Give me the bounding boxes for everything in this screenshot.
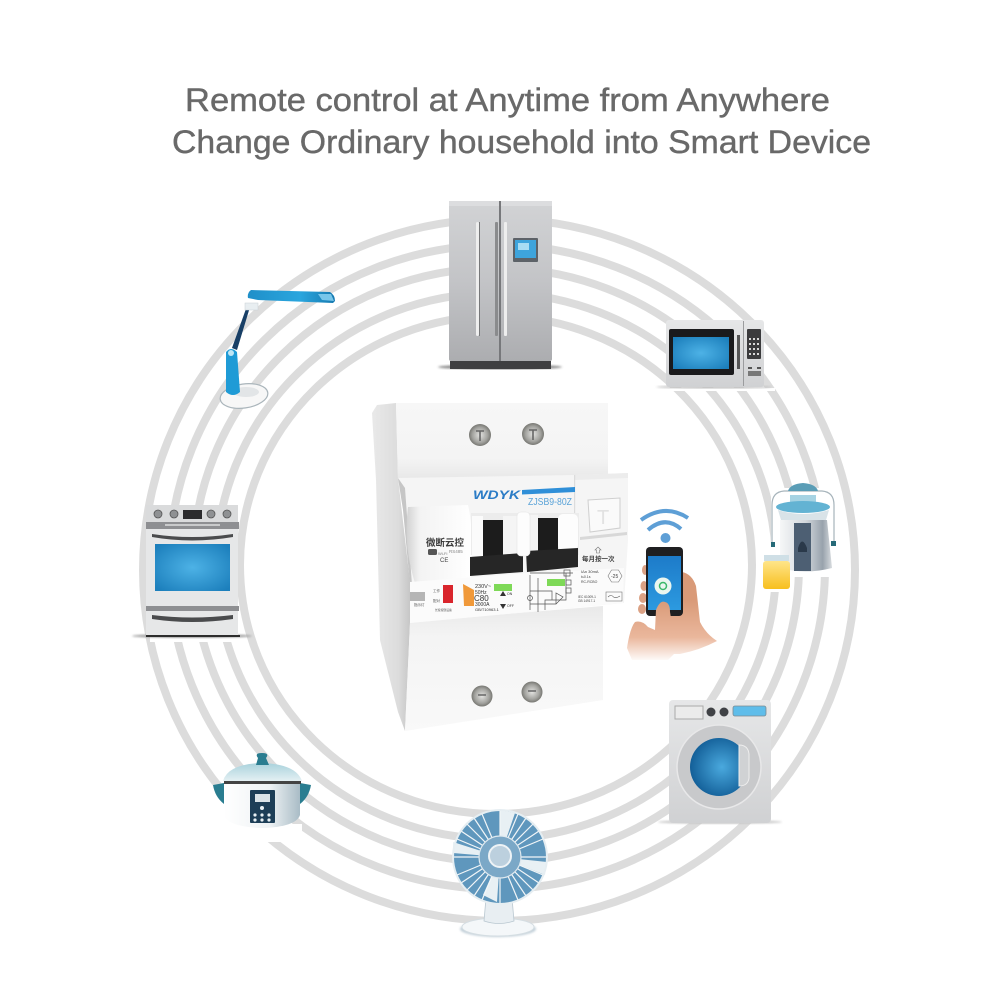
cover labels: RS485 xyxy=(449,549,463,554)
cover labels xyxy=(426,537,465,564)
circuit diagram xyxy=(528,570,573,612)
test note labels: t≤0.1s xyxy=(581,575,591,579)
ratings: OFF xyxy=(507,604,514,608)
cover labels: 微断云控 xyxy=(426,537,465,549)
icon: pot xyxy=(213,753,311,842)
toggle switches xyxy=(470,512,579,576)
icon: oven xyxy=(132,505,252,642)
test note labels: 每月按一次 xyxy=(582,554,615,563)
test button: T xyxy=(597,507,609,529)
ratings: C80 xyxy=(474,594,489,603)
terminal screws xyxy=(469,423,544,706)
test note labels: GB 14917-1 xyxy=(578,599,595,603)
cover labels: CE xyxy=(440,558,448,564)
brand xyxy=(473,487,575,508)
icon: washing machine xyxy=(658,700,782,824)
circuit breaker xyxy=(372,403,628,731)
upper body xyxy=(396,403,608,482)
rounded left cover xyxy=(407,505,472,583)
title: Change Ordinary household into Smart Device xyxy=(172,124,871,160)
test button xyxy=(580,498,627,540)
right hand xyxy=(660,572,717,654)
ratings: GB/T10963.1 xyxy=(475,607,500,612)
middle band xyxy=(398,473,628,623)
phone xyxy=(646,547,683,616)
din rail side xyxy=(372,403,410,731)
icon: phone with wifi xyxy=(627,511,717,660)
ratings xyxy=(474,584,514,612)
icon: fan xyxy=(453,810,550,944)
indicator xyxy=(410,592,425,601)
test note labels: RC-RCBO xyxy=(581,580,598,584)
red slider xyxy=(443,585,453,603)
brand: WDYK xyxy=(473,490,521,502)
band shading xyxy=(398,478,412,585)
icon: microwave xyxy=(650,320,775,391)
front hand xyxy=(627,602,677,660)
wifi symbol xyxy=(641,511,688,530)
ratings: 230V~ xyxy=(475,584,491,590)
left hand fingers xyxy=(638,565,648,614)
info strip xyxy=(410,568,624,623)
green windows xyxy=(494,584,512,591)
title: Remote control at Anytime from Anywhere xyxy=(185,82,830,118)
ratings: 3000A xyxy=(475,602,490,608)
icon: refrigerator xyxy=(438,201,562,370)
ratings: ON xyxy=(507,592,513,596)
cover labels: Wi-Fi xyxy=(438,551,447,556)
test note labels: -25 xyxy=(611,574,618,580)
test note labels xyxy=(578,547,622,603)
test note labels: IEC 61009-1 xyxy=(578,595,596,599)
circuit breaker: 配对 xyxy=(433,598,440,603)
lower body xyxy=(405,606,603,731)
icon: juicer xyxy=(760,483,836,592)
circuit breaker: 指示灯 xyxy=(414,602,425,607)
concentric signal rings xyxy=(143,219,855,921)
ratings: 50Hz xyxy=(475,590,487,596)
circuit breaker: 工作 xyxy=(433,588,440,593)
brand: ZJSB9-80Z xyxy=(528,497,572,508)
title xyxy=(172,82,871,160)
circuit breaker: 长按按键设备 xyxy=(435,608,452,612)
orange tab xyxy=(463,584,474,606)
icon: desk lamp xyxy=(219,290,335,411)
test note labels: IΔn 30mA xyxy=(581,569,599,574)
